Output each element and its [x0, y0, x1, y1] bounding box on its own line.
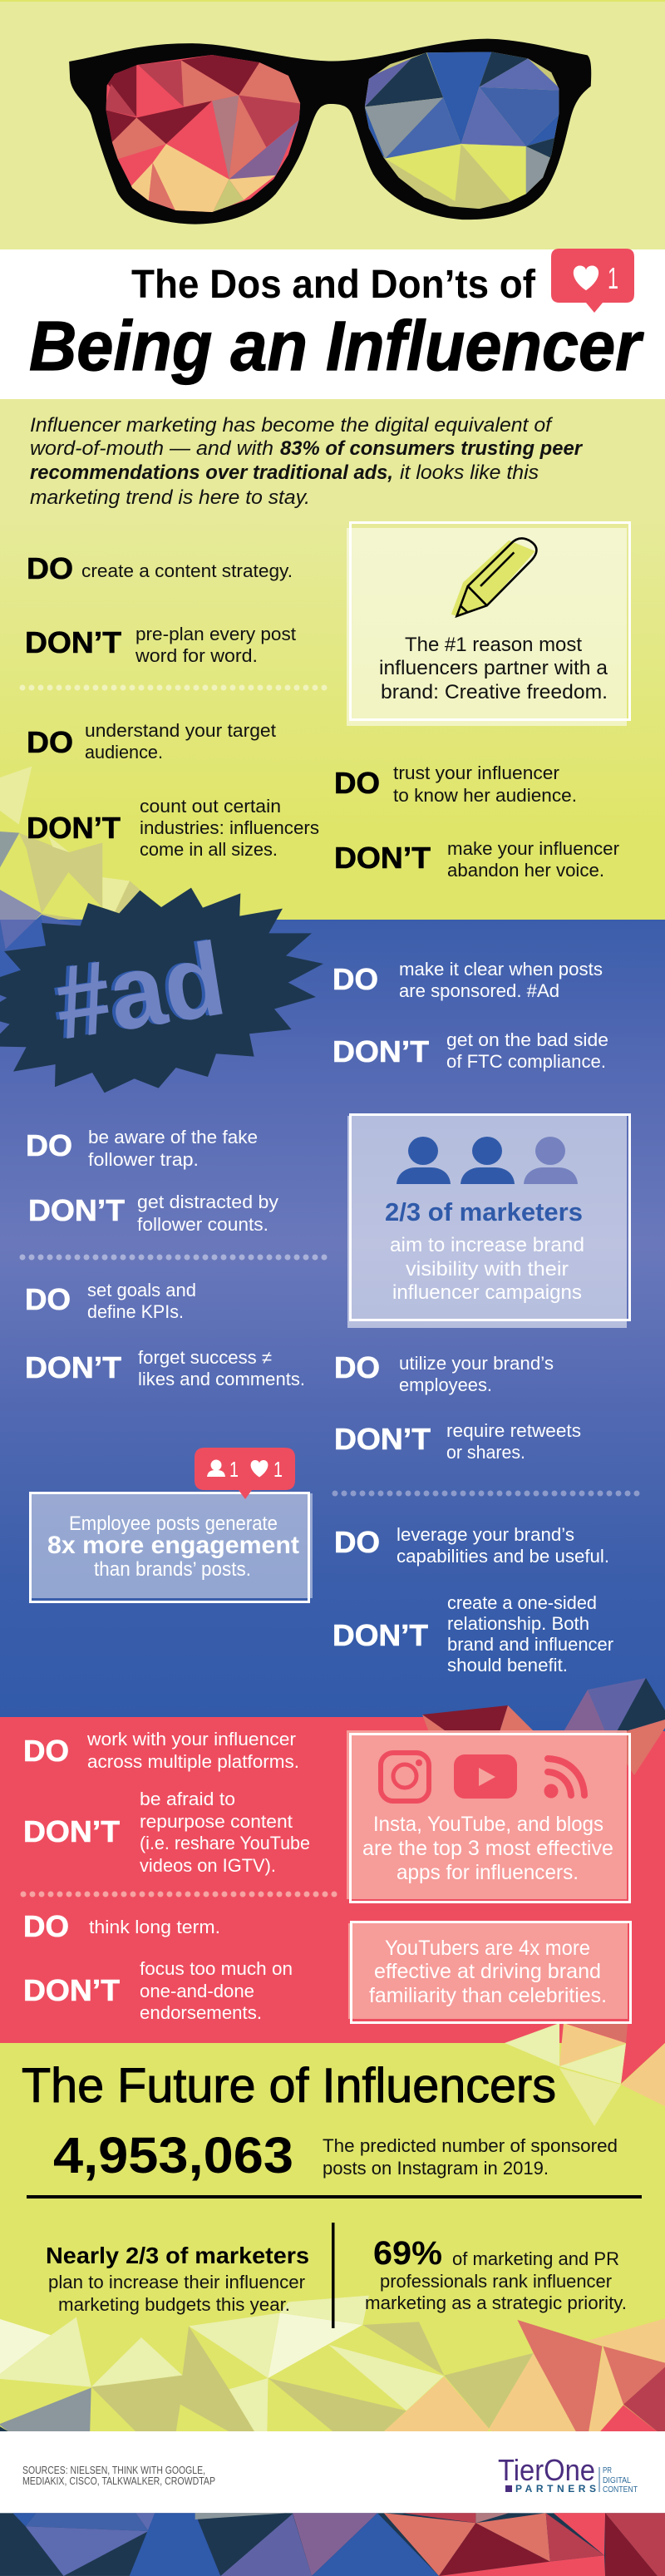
panel: red section dos and don'ts [23, 1729, 337, 2023]
panel: green future section background [0, 2043, 665, 2434]
item: do make clear [332, 959, 603, 1001]
panel: green section dos and don'ts [22, 551, 619, 881]
item: don't make: abandon her voice. [447, 860, 604, 881]
item: don't repurpose: (i.e. reshare YouTube [140, 1833, 310, 1853]
item: do create: create a content strategy. [81, 560, 293, 581]
item: do work: work with your influencer [86, 1729, 296, 1749]
text: employee posts: than brands’ posts. [94, 1558, 251, 1581]
text block: intro: marketing trend is here to stay. [30, 486, 310, 509]
item: don't one-sided: brand and influencer [447, 1634, 613, 1655]
text block: intro: Influencer marketing has become the digital equivalent of [30, 414, 553, 437]
text: creative freedom: influencers partner with a [379, 657, 608, 679]
item: do utilize: utilize your brand’s [399, 1353, 554, 1374]
item: do leverage: capabilities and be useful. [397, 1546, 609, 1567]
panel: bottom low-poly strip [0, 2513, 665, 2576]
item: don't focus [23, 1958, 293, 2023]
item: don't require [334, 1420, 581, 1463]
panel: polygons on left edge [0, 767, 140, 920]
panel: polygons in blue section [0, 915, 81, 977]
item: do trust: DO [334, 766, 380, 800]
icon: tierone partners logo: PARTNERS [515, 2483, 596, 2495]
item: don't distracted [28, 1192, 278, 1235]
text: youtubers [369, 1937, 607, 2007]
text: sources: MEDIAKIX, CISCO, TALKWALKER, CROWDTAP [22, 2475, 215, 2487]
text: sponsored posts [323, 2135, 618, 2179]
item: don't pre-plan: word for word. [135, 645, 258, 666]
text block: intro: 83% of consumers trusting peer [280, 437, 584, 460]
panel: footer [0, 2431, 665, 2513]
panel: employee posts callout [30, 1448, 313, 1601]
icon: follower and like badge: 1 [229, 1457, 239, 1482]
panel: 2/3 of marketers callout [347, 1114, 630, 1328]
panel: polygons between red and green [505, 2023, 665, 2126]
text: top apps: are the top 3 most effective [362, 1837, 613, 1860]
text: top apps: Insta, YouTube, and blogs [373, 1813, 603, 1836]
icon: tierone partners logo: PR [603, 2465, 612, 2475]
item: don't one-sided: create a one-sided [447, 1592, 597, 1613]
item: don't one-sided: should benefit. [447, 1655, 568, 1675]
stat: nearly 2/3 of marketers: Nearly 2/3 of marketers [46, 2243, 309, 2268]
item: don't one-sided: DON’T [332, 1618, 428, 1652]
item: do create: DO [27, 551, 73, 585]
item: don't make: make your influencer [447, 838, 619, 859]
item: do utilize: employees. [399, 1374, 492, 1395]
panel: youtubers callout [348, 1922, 630, 2022]
item: don't ftc [332, 1029, 608, 1072]
item: don't distracted: follower counts. [137, 1214, 268, 1235]
item: do leverage [334, 1524, 609, 1567]
panel: top apps callout [347, 1730, 630, 1902]
stat: 69% [365, 2235, 627, 2313]
item: don't require: or shares. [446, 1442, 525, 1463]
item: don't repurpose [23, 1789, 310, 1876]
text block: intro [30, 414, 584, 509]
item: don't one-sided: relationship. Both [447, 1613, 589, 1634]
text: brand visibility: visibility with their [406, 1258, 569, 1281]
text: sources: SOURCES: NIELSEN, THINK WITH GOOGLE, [22, 2464, 205, 2476]
icon: sunglasses with low-poly lenses [69, 39, 591, 225]
icon: tierone partners logo: TierOne [498, 2453, 595, 2487]
heading: future of influencers: The Future of Influencers [22, 2059, 556, 2113]
text: creative freedom: The #1 reason most [405, 634, 582, 656]
item: don't distracted: get distracted by [137, 1192, 278, 1212]
item: don't repurpose: DON’T [23, 1814, 120, 1848]
text: top apps [362, 1813, 613, 1884]
text: creative freedom [379, 634, 608, 703]
chart: bottom low-poly yellow [0, 2296, 665, 2431]
stat: 2/3 of marketers: 2/3 of marketers [385, 1197, 583, 1226]
background: green top [0, 0, 665, 920]
text: sources [22, 2464, 215, 2487]
item: do think: think long term. [89, 1917, 220, 1937]
icon: tierone partners logo [498, 2453, 638, 2495]
stat: nearly 2/3 of marketers [46, 2243, 309, 2315]
item: do understand: DO [27, 725, 73, 759]
item: don't ftc: DON’T [332, 1034, 429, 1068]
item: don't forget: DON’T [25, 1350, 121, 1384]
icon: rss [544, 1759, 584, 1798]
item: do create [27, 551, 293, 585]
icon: follower and like badge: 1 [273, 1457, 283, 1482]
item: don't count out: count out certain [140, 796, 281, 817]
icon: follower and like badge [195, 1448, 295, 1499]
text block: intro: it looks like this [400, 461, 539, 484]
item: don't one-sided [332, 1592, 613, 1675]
item: don't focus: one-and-done [140, 1981, 254, 2001]
icon: three people [397, 1137, 578, 1184]
item: do think: DO [23, 1909, 69, 1943]
text block: intro: word-of-mouth — and with [30, 437, 273, 460]
item: do work: across multiple platforms. [87, 1751, 299, 1772]
panel: creative freedom callout [347, 522, 630, 726]
stat: 69%: marketing as a strategic priority. [365, 2292, 627, 2313]
text: #ad: #ad [43, 920, 229, 1061]
item: don't focus: endorsements. [140, 2002, 262, 2023]
item: don't require: DON’T [334, 1422, 431, 1456]
item: do fake follower: follower trap. [88, 1149, 199, 1170]
stat: 4,953,063: 4,953,063 [53, 2127, 293, 2184]
item: do set goals: set goals and [87, 1280, 196, 1300]
item: do work [23, 1729, 299, 1772]
item: don't make: DON’T [334, 841, 431, 875]
text: employee posts [47, 1513, 299, 1581]
stat: nearly 2/3 of marketers: plan to increase their influencer [48, 2272, 305, 2292]
item: do utilize [334, 1350, 554, 1395]
icon: pencil [451, 538, 536, 617]
icon: tierone partners logo: DIGITAL [603, 2475, 631, 2485]
item: don't forget: forget success ≠ [138, 1347, 272, 1368]
text: youtubers: familiarity than celebrities. [369, 1984, 607, 2007]
item: do think [23, 1909, 220, 1943]
panel: blue section background [0, 920, 665, 1731]
item: do fake follower [26, 1127, 258, 1170]
item: do understand: audience. [85, 742, 163, 762]
item: do leverage: leverage your brand’s [397, 1524, 574, 1545]
item: do understand [27, 720, 276, 762]
text: brand visibility [390, 1234, 584, 1304]
panel: future of influencers [22, 2059, 642, 2328]
icon: youtube [454, 1754, 517, 1799]
icon: instagram [381, 1753, 429, 1801]
item: do fake follower: DO [26, 1128, 72, 1162]
text: employee posts: 8x more engagement [47, 1532, 299, 1559]
stat: 69%: 69% [373, 2235, 442, 2272]
item: do make clear: DO [332, 962, 378, 996]
item: don't repurpose: repurpose content [140, 1811, 293, 1832]
item: don't focus: DON’T [23, 1973, 120, 2007]
item: do fake follower: be aware of the fake [88, 1127, 258, 1147]
item: don't pre-plan: pre-plan every post [135, 624, 296, 644]
panel: polygons above red section [422, 1678, 665, 1775]
text: #ad: #ad [47, 920, 233, 1062]
text: brand visibility: aim to increase brand [390, 1234, 584, 1256]
panel: red section background [0, 1717, 665, 2047]
text: youtubers: YouTubers are 4x more [385, 1937, 590, 1960]
item: don't forget: likes and comments. [138, 1369, 305, 1389]
stat: nearly 2/3 of marketers: marketing budgets this year. [58, 2294, 290, 2315]
heading: being an influencer: Being an Influencer [29, 307, 644, 385]
item: do set goals [25, 1280, 196, 1322]
item: do understand: understand your target [85, 720, 276, 741]
item: do work: DO [23, 1734, 69, 1768]
item: don't distracted: DON’T [28, 1193, 125, 1227]
item: don't forget [25, 1347, 305, 1389]
item: do set goals: DO [25, 1282, 71, 1316]
text: brand visibility: influencer campaigns [392, 1281, 582, 1304]
stat: 69%: of marketing and PR [452, 2248, 619, 2269]
item: do utilize: DO [334, 1350, 380, 1384]
icon: like notification badge: 1 [608, 261, 618, 295]
icon: tierone partners logo: CONTENT [603, 2485, 638, 2495]
item: do trust [334, 762, 577, 806]
text: sponsored posts: posts on Instagram in 2019. [323, 2158, 549, 2179]
item: don't make [334, 838, 619, 881]
item: do set goals: define KPIs. [87, 1301, 184, 1322]
heading: the dos and don'ts of: The Dos and Don’ts of [131, 263, 536, 307]
text: sponsored posts: The predicted number of sponsored [323, 2135, 618, 2156]
text: top apps: apps for influencers. [397, 1861, 579, 1884]
item: do make clear: are sponsored. #Ad [399, 980, 559, 1001]
icon: #ad starburst [0, 888, 323, 1093]
item: don't pre-plan: DON’T [25, 625, 121, 659]
text: employee posts: Employee posts generate [69, 1513, 278, 1535]
item: don't ftc: get on the bad side [446, 1029, 608, 1050]
item: don't repurpose: be afraid to [140, 1789, 235, 1809]
text block: intro: recommendations over traditional ads, [30, 461, 393, 484]
item: don't pre-plan [25, 624, 296, 666]
stat: 69%: professionals rank influencer [380, 2271, 612, 2292]
item: don't require: require retweets [446, 1420, 581, 1441]
item: don't count out: come in all sizes. [140, 839, 278, 860]
icon: like notification badge [551, 249, 634, 313]
item: don't ftc: of FTC compliance. [446, 1051, 606, 1072]
item: don't count out: industries: influencers [140, 817, 319, 838]
text: creative freedom: brand: Creative freedom. [381, 681, 608, 703]
item: don't count out: DON’T [27, 811, 121, 845]
item: do trust: trust your influencer [393, 762, 559, 783]
item: do make clear: make it clear when posts [399, 959, 603, 980]
item: do leverage: DO [334, 1525, 380, 1559]
text: youtubers: effective at driving brand [374, 1960, 601, 1983]
item: do trust: to know her audience. [393, 785, 577, 806]
item: don't focus: focus too much on [140, 1958, 293, 1979]
item: don't repurpose: videos on IGTV). [140, 1855, 276, 1876]
panel: blue section dos and don'ts [22, 959, 639, 1675]
item: don't count out [27, 796, 319, 860]
panel: title banner [0, 249, 665, 399]
